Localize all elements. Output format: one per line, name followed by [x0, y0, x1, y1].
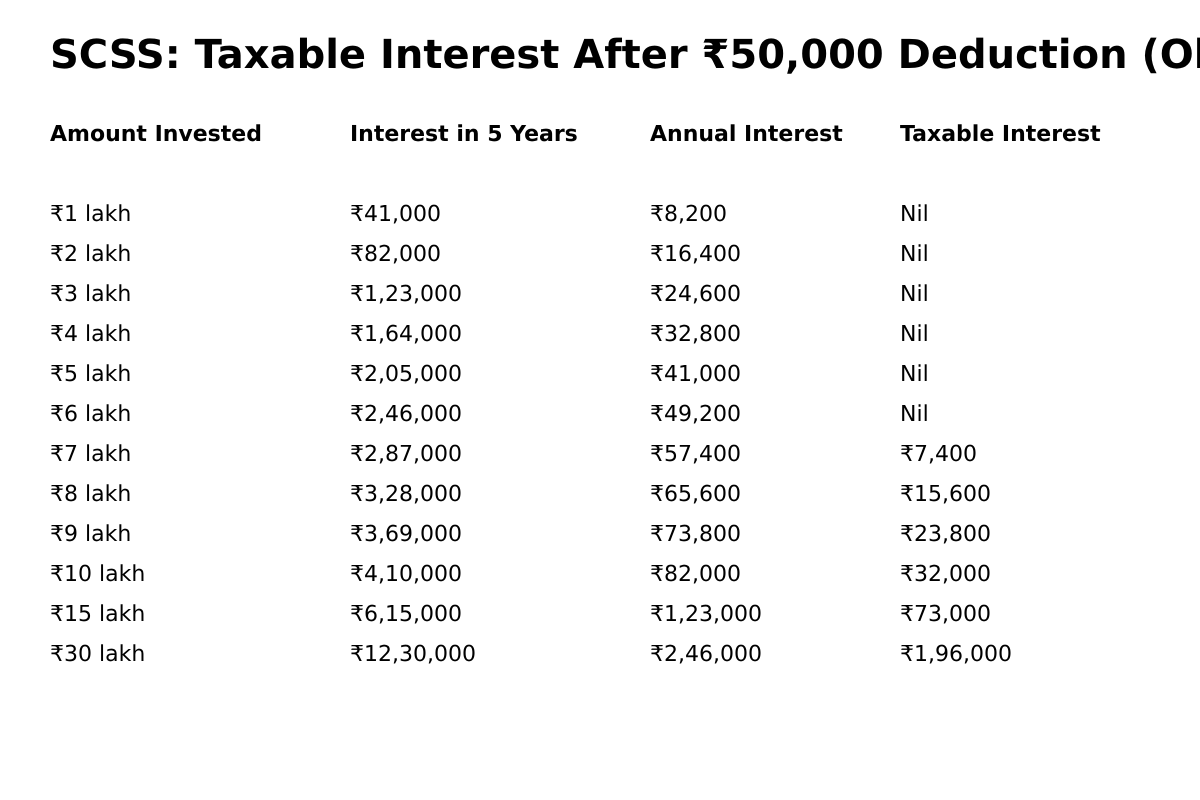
row: 5 lakh: Nil [900, 362, 929, 387]
row: 2 lakh: ₹16,400 [650, 242, 741, 267]
table header: Amount Invested [50, 122, 262, 147]
row: 9 lakh: ₹23,800 [900, 522, 991, 547]
row: 15 lakh: ₹73,000 [900, 602, 991, 627]
row: 5 lakh: ₹41,000 [650, 362, 741, 387]
row: 5 lakh: ₹2,05,000 [350, 362, 462, 387]
row: 4 lakh: ₹1,64,000 [350, 322, 462, 347]
row: 7 lakh: ₹2,87,000 [350, 442, 462, 467]
row: 30 lakh: ₹2,46,000 [650, 642, 762, 667]
row: 3 lakh: ₹24,600 [650, 282, 741, 307]
table rows [50, 202, 1012, 667]
table header: Interest in 5 Years [350, 122, 578, 147]
row: 30 lakh: ₹30 lakh [50, 642, 145, 667]
row: 10 lakh: ₹10 lakh [50, 562, 145, 587]
row: 1 lakh: ₹8,200 [650, 202, 727, 227]
row: 30 lakh: ₹12,30,000 [350, 642, 476, 667]
row: 3 lakh: Nil [900, 282, 929, 307]
row: 6 lakh: ₹6 lakh [50, 402, 131, 427]
row: 6 lakh: ₹2,46,000 [350, 402, 462, 427]
row: 6 lakh: ₹49,200 [650, 402, 741, 427]
row: 10 lakh: ₹82,000 [650, 562, 741, 587]
row: 8 lakh: ₹15,600 [900, 482, 991, 507]
row: 9 lakh: ₹73,800 [650, 522, 741, 547]
row: 9 lakh: ₹9 lakh [50, 522, 131, 547]
row: 1 lakh: ₹1 lakh [50, 202, 131, 227]
table header [50, 122, 1101, 147]
row: 10 lakh: ₹4,10,000 [350, 562, 462, 587]
row: 4 lakh: Nil [900, 322, 929, 347]
row: 3 lakh: ₹1,23,000 [350, 282, 462, 307]
row: 6 lakh: Nil [900, 402, 929, 427]
row: 8 lakh: ₹8 lakh [50, 482, 131, 507]
row: 7 lakh: ₹7 lakh [50, 442, 131, 467]
row: 15 lakh: ₹6,15,000 [350, 602, 462, 627]
row: 8 lakh [50, 482, 991, 507]
row: 9 lakh: ₹3,69,000 [350, 522, 462, 547]
row: 5 lakh [50, 362, 929, 387]
row: 6 lakh [50, 402, 929, 427]
row: 2 lakh: ₹2 lakh [50, 242, 131, 267]
row: 2 lakh: ₹82,000 [350, 242, 441, 267]
row: 15 lakh: ₹1,23,000 [650, 602, 762, 627]
row: 1 lakh: Nil [900, 202, 929, 227]
row: 5 lakh: ₹5 lakh [50, 362, 131, 387]
row: 15 lakh [50, 602, 991, 627]
row: 30 lakh: ₹1,96,000 [900, 642, 1012, 667]
row: 4 lakh: ₹4 lakh [50, 322, 131, 347]
row: 15 lakh: ₹15 lakh [50, 602, 145, 627]
row: 4 lakh [50, 322, 929, 347]
row: 7 lakh [50, 442, 977, 467]
row: 3 lakh: ₹3 lakh [50, 282, 131, 307]
row: 30 lakh [50, 642, 1012, 667]
row: 1 lakh: ₹41,000 [350, 202, 441, 227]
row: 4 lakh: ₹32,800 [650, 322, 741, 347]
row: 10 lakh: ₹32,000 [900, 562, 991, 587]
row: 3 lakh [50, 282, 929, 307]
row: 9 lakh [50, 522, 991, 547]
table header: Annual Interest [650, 122, 843, 147]
row: 10 lakh [50, 562, 991, 587]
row: 8 lakh: ₹3,28,000 [350, 482, 462, 507]
row: 8 lakh: ₹65,600 [650, 482, 741, 507]
table header: Taxable Interest [900, 122, 1101, 147]
row: 7 lakh: ₹7,400 [900, 442, 977, 467]
row: 1 lakh [50, 202, 929, 227]
row: 7 lakh: ₹57,400 [650, 442, 741, 467]
row: 2 lakh [50, 242, 929, 267]
row: 2 lakh: Nil [900, 242, 929, 267]
